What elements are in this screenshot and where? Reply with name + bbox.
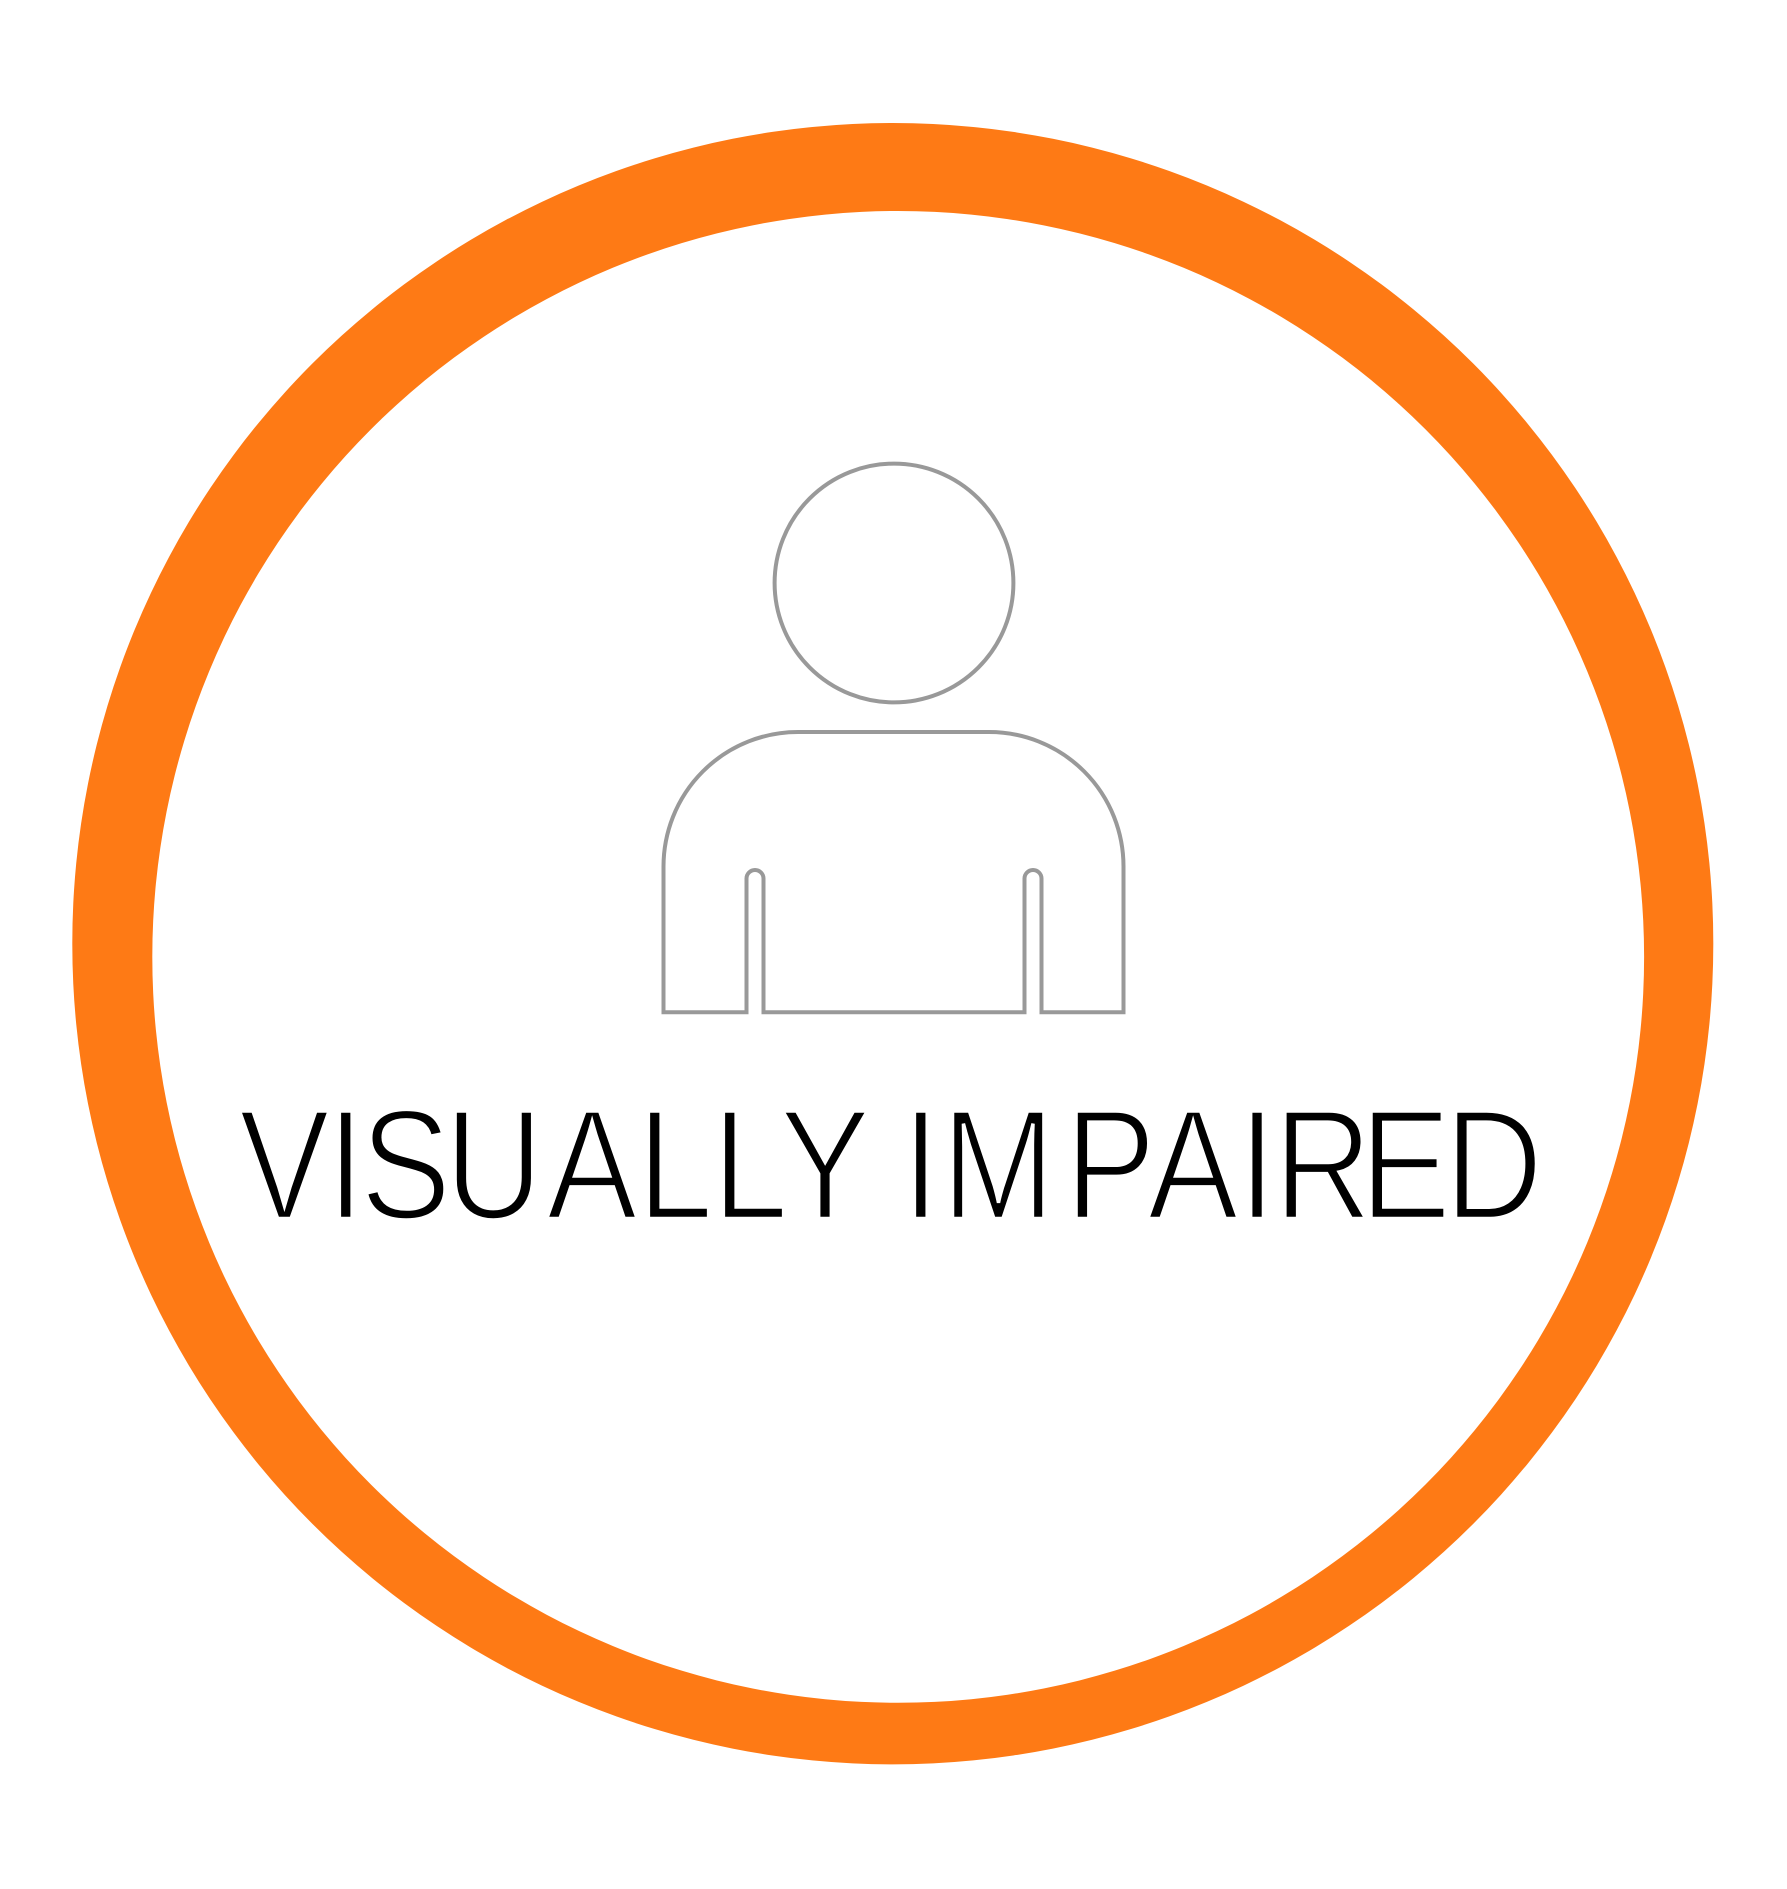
- icon: person torso and arms: [664, 732, 1124, 1012]
- icon: person outline: [664, 464, 1124, 1012]
- icon: person head: [775, 464, 1013, 702]
- label: VISUALLY IMPAIRED: VISUALLY IMPAIRED: [239, 1078, 1543, 1253]
- orange ring: [72, 123, 1713, 1764]
